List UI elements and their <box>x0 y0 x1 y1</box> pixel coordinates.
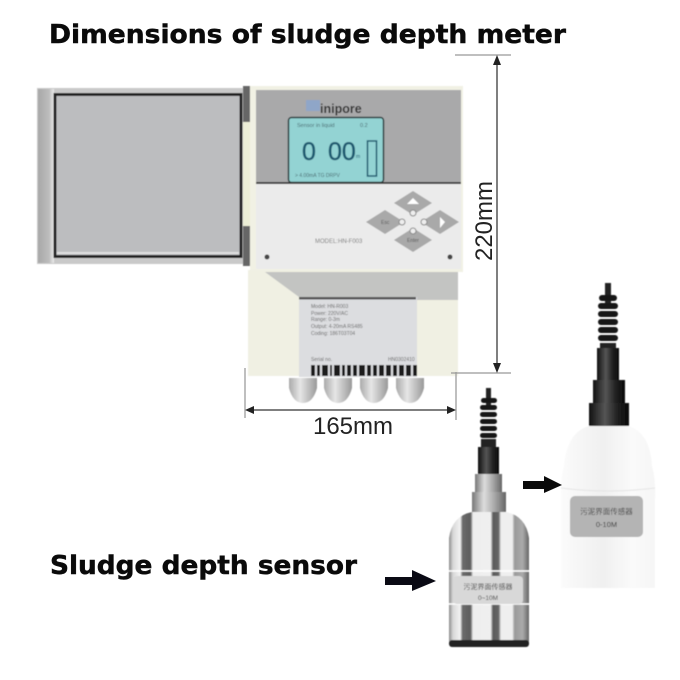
device data label: Output: 4-20mA RS485 <box>311 324 363 330</box>
LCD screen: Sensor in liquid <box>297 123 335 129</box>
sensor label: 0~10M <box>478 595 498 602</box>
sensor label: 污泥界面传感器 <box>464 582 512 591</box>
screws <box>264 254 453 369</box>
hinge strip <box>243 86 255 266</box>
white control panel <box>256 184 461 269</box>
threads <box>475 474 502 493</box>
LCD screen: > 4.00mA TG DRPV <box>295 173 340 179</box>
device data label: HN0302410 <box>388 357 415 363</box>
LCD screen: m <box>356 154 360 160</box>
LCD screen: 0 <box>302 138 316 166</box>
sensor label <box>453 576 523 604</box>
strain relief <box>480 398 497 448</box>
sensor cable <box>486 388 491 406</box>
stainless steel sensor <box>449 388 529 647</box>
white sensor <box>561 283 655 588</box>
open door panel <box>37 88 243 264</box>
device data label: Coding: 186T03T04 <box>311 331 355 337</box>
device data label: Range: 0-3m <box>311 317 340 323</box>
arrow to steel sensor <box>385 570 436 591</box>
grey sensor label <box>570 496 643 537</box>
LCD screen <box>288 118 384 182</box>
meter body <box>250 86 463 272</box>
dark divider <box>256 182 461 184</box>
meter device <box>37 86 463 403</box>
dimension: height 220mm <box>451 55 511 373</box>
device data label: Serial no. <box>311 357 332 363</box>
title: Dimensions of sludge depth meter <box>49 20 566 50</box>
model label: MODEL:HN-F003 <box>315 239 363 245</box>
black collar <box>478 447 499 474</box>
black collars <box>597 348 619 380</box>
device data label: Model: HN-R003 <box>311 304 348 310</box>
grey sensor label: 0-10M <box>596 520 617 529</box>
top grey panel <box>256 90 461 183</box>
dimension: width 165mm <box>245 368 456 440</box>
cable glands <box>289 378 424 403</box>
dimension: width 165mm: 165mm <box>313 413 393 440</box>
brand logo: inipore <box>320 102 362 116</box>
keypad: Enter <box>407 238 419 244</box>
brand logo <box>306 100 362 116</box>
device data label <box>299 297 417 377</box>
keypad <box>366 191 459 252</box>
dimension: height 220mm: 220mm <box>471 181 498 261</box>
white body <box>561 426 655 588</box>
lower housing <box>248 270 458 376</box>
device data label: Power: 220V/AC <box>311 311 348 317</box>
steel body <box>449 512 529 647</box>
LCD screen: 0.2 <box>360 123 368 129</box>
grey sensor label: 污泥界面传感器 <box>580 506 633 516</box>
sensor heading: Sludge depth sensor <box>50 551 357 581</box>
LCD screen: 00 <box>328 138 356 166</box>
keypad: Esc <box>381 220 390 226</box>
sensor cable <box>605 283 611 305</box>
strain relief <box>598 295 618 350</box>
arrow to white sensor <box>523 476 562 493</box>
